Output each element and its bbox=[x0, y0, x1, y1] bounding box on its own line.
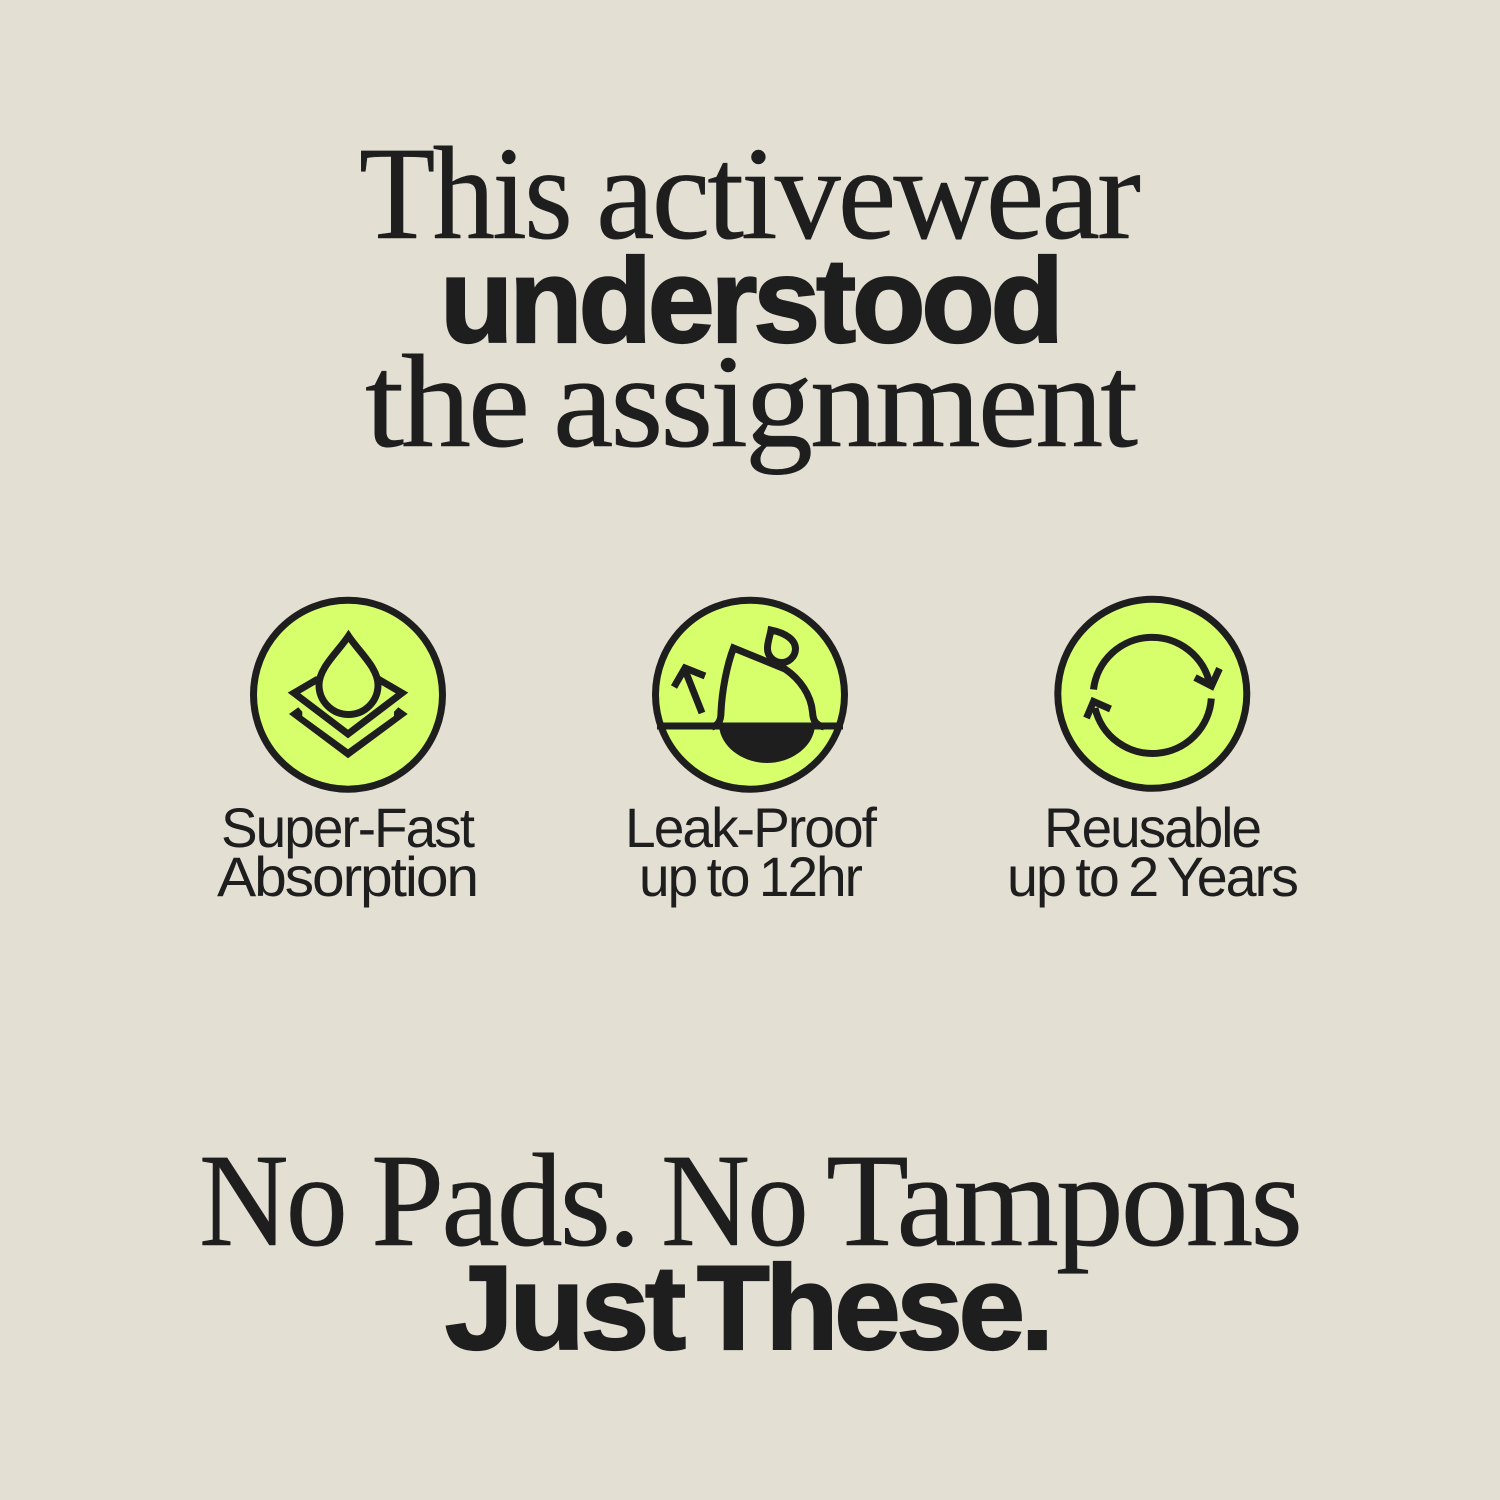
closing statement bbox=[199, 1126, 1300, 1375]
label: super-fast absorption: Absorption bbox=[217, 845, 477, 908]
title bbox=[359, 119, 1141, 475]
icon: water drop on absorbent layers bbox=[254, 600, 442, 789]
label: reusable up to 2 years: Reusable bbox=[1044, 796, 1260, 859]
title: the bbox=[365, 327, 527, 475]
label: super-fast absorption bbox=[217, 796, 477, 908]
title: activewear bbox=[596, 119, 1141, 267]
closing statement: Pads. bbox=[371, 1126, 638, 1274]
label: leak-proof up to 12hr bbox=[625, 796, 877, 908]
title: assignment bbox=[553, 327, 1138, 475]
closing statement: Just bbox=[445, 1241, 685, 1375]
icon: reusable cycle arrows bbox=[1058, 599, 1247, 788]
title: understood bbox=[440, 234, 1060, 368]
label: reusable up to 2 years bbox=[1007, 796, 1297, 908]
closing statement: No bbox=[199, 1126, 345, 1274]
closing statement: No bbox=[661, 1126, 806, 1274]
closing statement: Tampons bbox=[826, 1126, 1300, 1274]
label: reusable up to 2 years: up to 2 Years bbox=[1007, 845, 1297, 908]
icon: leak-proof gusset bbox=[656, 600, 844, 789]
label: leak-proof up to 12hr: Leak-Proof bbox=[625, 796, 877, 859]
label: leak-proof up to 12hr: up to 12hr bbox=[639, 845, 862, 908]
closing statement: These. bbox=[697, 1241, 1050, 1375]
title: This bbox=[359, 119, 570, 267]
label: super-fast absorption: Super-Fast bbox=[221, 796, 475, 859]
